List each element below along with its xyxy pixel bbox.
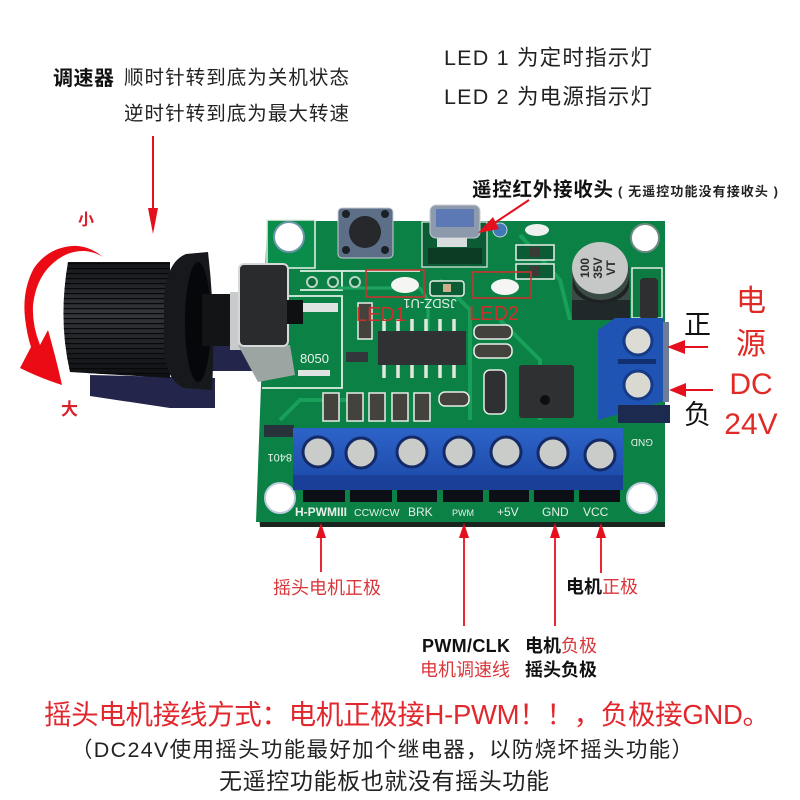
button xyxy=(338,208,393,258)
heading: LED legend: LED 2 为电源指示灯 xyxy=(444,85,652,109)
silk labels on lower edge: H-PWMIII xyxy=(295,505,347,519)
callout: power terminals xyxy=(667,310,713,430)
label: motor positive: 电机正极 xyxy=(566,577,638,597)
label: PWM/CLK: PWM/CLK xyxy=(422,636,510,656)
small transistor xyxy=(346,352,368,362)
label: PWM/CLK: 电机调速线 xyxy=(420,660,510,680)
silk labels on lower edge: VCC xyxy=(583,505,609,519)
label: large: 大 xyxy=(61,400,78,419)
power terminal block xyxy=(598,318,670,423)
board shadow edge xyxy=(258,500,665,527)
IC chip xyxy=(378,319,466,378)
IR receiver xyxy=(422,205,487,267)
LED labels: LED1 xyxy=(356,304,406,326)
label: motor negative: 电机负极 xyxy=(525,636,597,656)
metal housing xyxy=(238,345,295,382)
circuit board: 8401 xyxy=(268,451,292,463)
callout: power terminals: 正 xyxy=(684,310,711,340)
silk labels on lower edge: BRK xyxy=(408,505,433,519)
silk labels on lower edge: GND xyxy=(631,436,653,447)
mounting bracket xyxy=(90,375,215,408)
note: no remote: 无遥控功能板也就没有摇头功能 xyxy=(219,768,549,794)
small resistors top xyxy=(516,224,554,279)
note: wiring method: 摇头电机接线方式：电机正极接H-PWM！！，负极接GND。 xyxy=(44,699,770,730)
callout: power DC 24V: 源 xyxy=(736,328,766,361)
LED marker boxes xyxy=(366,270,531,298)
main terminal block xyxy=(293,428,623,502)
arrow: VCC xyxy=(596,523,606,573)
heading: potentiometer instructions: 顺时针转到底为关机状态 xyxy=(124,67,349,89)
knurled body xyxy=(63,262,170,378)
board code text: JSDZ-U1 xyxy=(403,296,457,311)
label: motor negative xyxy=(525,636,597,680)
heading: LED legend: LED 1 为定时指示灯 xyxy=(444,46,652,70)
callout: power terminals: 负 xyxy=(684,400,711,430)
silk labels on lower edge: PWM xyxy=(452,508,474,518)
silk labels on lower edge: GND xyxy=(542,505,569,519)
heading: LED legend xyxy=(444,46,652,109)
label: motor negative: 摇头负极 xyxy=(525,660,597,680)
side diode xyxy=(484,370,506,414)
capacitor: VT xyxy=(604,260,618,276)
arrow: GND xyxy=(550,523,560,626)
label: PWM/CLK xyxy=(420,636,510,680)
LED labels: LED2 xyxy=(469,303,519,325)
circuit board xyxy=(256,205,670,527)
silk outlines xyxy=(262,271,420,388)
LED labels xyxy=(356,303,519,326)
callout: IR receiver xyxy=(472,178,778,233)
regulator right of capacitor xyxy=(632,268,662,320)
LEDs xyxy=(391,277,519,296)
collar xyxy=(164,252,213,390)
board silk 8050: 8050 xyxy=(300,351,329,366)
silk labels on lower edge: CCW/CW xyxy=(354,507,400,519)
header pads xyxy=(307,277,360,287)
SMD resistors xyxy=(323,303,512,421)
callout: IR receiver: 遥控红外接收头 xyxy=(472,178,613,201)
capacitor xyxy=(572,242,630,320)
solder pads xyxy=(298,303,338,376)
callout: power DC 24V xyxy=(724,285,778,441)
potentiometer knob xyxy=(63,252,303,408)
square inductor xyxy=(519,365,574,418)
label: swing motor positive: 摇头电机正极 xyxy=(273,578,381,598)
board body xyxy=(256,221,665,522)
capacitor: 35V xyxy=(591,257,605,279)
shaft xyxy=(202,294,238,346)
callout: IR receiver: ( 无遥控功能没有接收头 ) xyxy=(618,184,778,199)
arrow: rotation direction xyxy=(20,246,103,385)
arrow: H-PWM xyxy=(316,523,326,572)
callout: power DC 24V: 电 xyxy=(736,285,766,318)
silk labels on lower edge: +5V xyxy=(497,505,519,519)
callout: power DC 24V: DC xyxy=(729,368,773,401)
mounting holes xyxy=(274,222,304,252)
black cap xyxy=(239,264,288,346)
heading: potentiometer instructions: 逆时针转到底为最大转速 xyxy=(124,103,349,125)
heading: potentiometer instructions xyxy=(53,67,349,125)
silk labels on lower edge xyxy=(295,436,653,519)
label: small: 小 xyxy=(78,211,94,229)
capacitor: 100 xyxy=(578,258,592,278)
note: relay advice: （DC24V使用摇头功能最好加个继电器，以防烧坏摇头功能） xyxy=(71,738,693,762)
callout: power DC 24V: 24V xyxy=(724,408,778,441)
arrow: PWM/CLK xyxy=(459,523,469,626)
arrow: potentiometer pointer xyxy=(148,136,158,234)
heading: potentiometer instructions: 调速器 xyxy=(53,67,114,90)
